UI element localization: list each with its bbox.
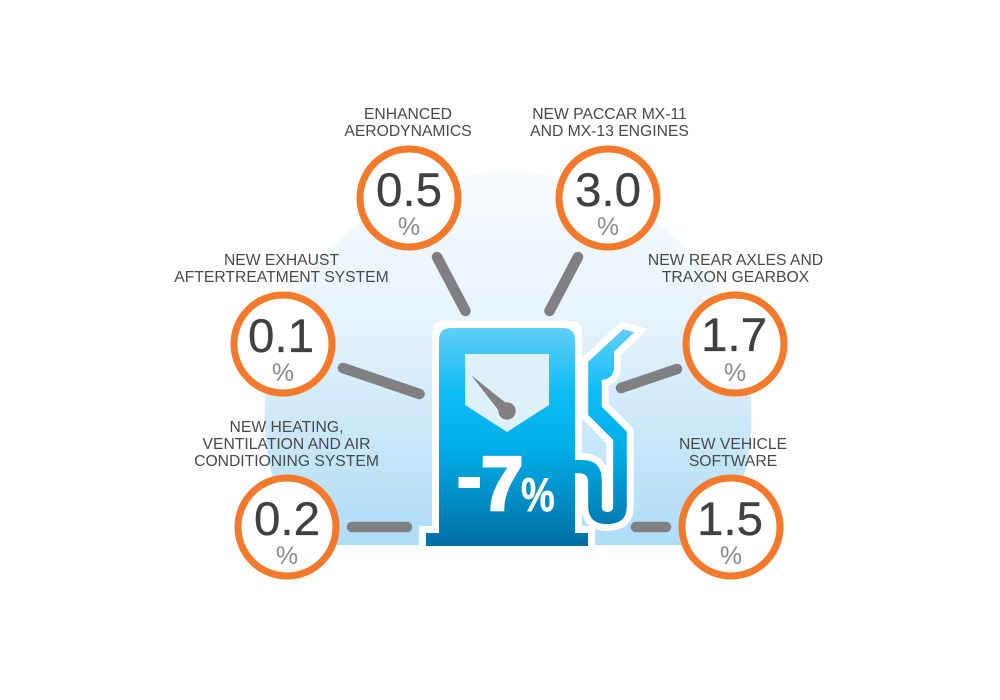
item: enhanced aerodynamics: %	[398, 213, 420, 241]
item: vehicle software: NEW VEHICLE	[679, 436, 787, 453]
gauge needle	[472, 376, 516, 420]
item: vehicle software: 1.5	[697, 493, 763, 546]
item: new engines: AND MX-13 ENGINES	[530, 123, 689, 140]
pump body	[426, 328, 588, 546]
item: vehicle software: %	[720, 542, 742, 570]
pump nozzle hose	[575, 329, 634, 524]
connector lines	[343, 257, 677, 527]
item: exhaust aftertreatment	[174, 252, 389, 393]
item: new engines	[530, 106, 689, 247]
item: vehicle software	[679, 436, 787, 576]
item: new engines: NEW PACCAR MX-11	[532, 106, 687, 123]
item: heating ventilation air conditioning: CONDITIONING SYSTEM	[194, 453, 379, 470]
pump value: 7	[481, 442, 523, 527]
item: vehicle software: SOFTWARE	[689, 453, 777, 470]
item: enhanced aerodynamics: AERODYNAMICS	[344, 123, 472, 140]
item: enhanced aerodynamics	[344, 106, 472, 247]
fuel pump	[419, 321, 634, 546]
item: new engines: %	[597, 213, 619, 241]
item: heating ventilation air conditioning: VENTILATION AND AIR	[203, 436, 370, 453]
item: heating ventilation air conditioning	[194, 419, 379, 576]
item: heating ventilation air conditioning: %	[276, 542, 298, 570]
item: exhaust aftertreatment: NEW EXHAUST	[224, 252, 339, 269]
item: new engines: 3.0	[575, 164, 641, 217]
gauge window	[465, 354, 549, 432]
item: enhanced aerodynamics: ENHANCED	[364, 106, 452, 123]
item: rear axles and gearbox	[648, 252, 823, 393]
pump value: %	[521, 469, 555, 522]
item: exhaust aftertreatment: %	[272, 359, 294, 387]
pump outline	[419, 321, 595, 546]
item: rear axles and gearbox: TRAXON GEARBOX	[662, 269, 810, 286]
item: rear axles and gearbox: %	[724, 359, 746, 387]
item: exhaust aftertreatment: AFTERTREATMENT SYSTEM	[174, 269, 389, 286]
item: rear axles and gearbox: 1.7	[701, 309, 767, 362]
background dome	[264, 181, 752, 545]
item: heating ventilation air conditioning: 0.2	[254, 493, 320, 546]
nozzle fill	[575, 329, 634, 524]
item: exhaust aftertreatment: 0.1	[248, 310, 314, 363]
item: enhanced aerodynamics: 0.5	[376, 164, 442, 217]
item: heating ventilation air conditioning: NEW HEATING,	[230, 419, 343, 436]
pump value	[458, 442, 555, 527]
item: rear axles and gearbox: NEW REAR AXLES AND	[648, 252, 823, 269]
